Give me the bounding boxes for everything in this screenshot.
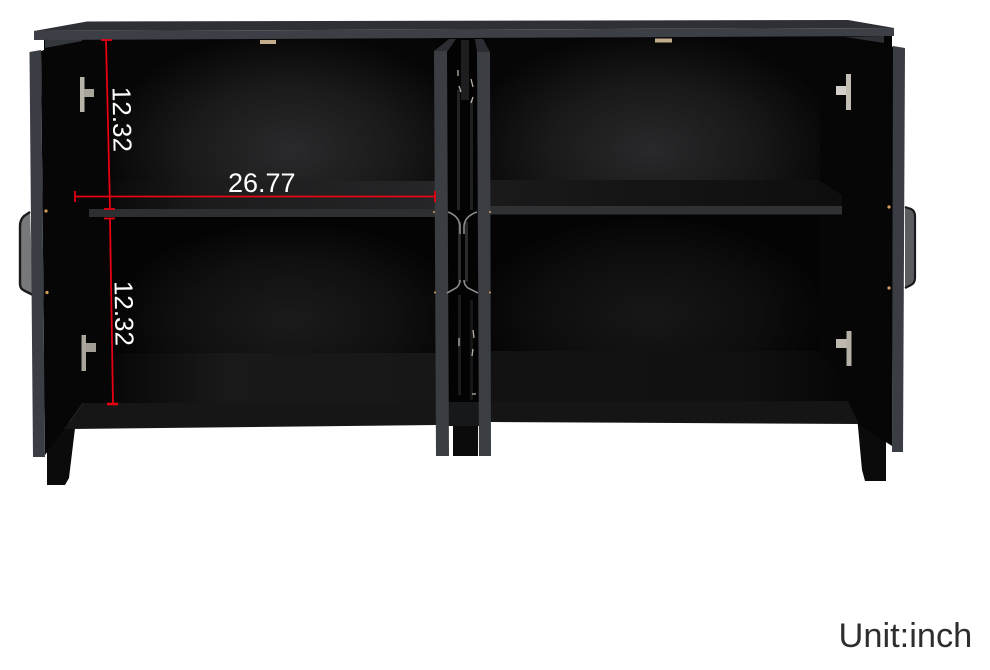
shelf surface left	[110, 181, 436, 209]
lower back wall left	[110, 217, 436, 353]
width dimension line	[75, 191, 435, 202]
lower back wall right	[489, 214, 820, 351]
icon: upper left hinge	[80, 77, 94, 112]
center door handles	[447, 212, 478, 293]
floor left	[110, 353, 436, 403]
shelf surface right	[489, 180, 842, 206]
center left door edge	[434, 39, 456, 456]
left door edge	[30, 50, 45, 457]
icon: lower left hinge	[82, 335, 96, 371]
left bottom rail	[64, 403, 437, 429]
right door edge	[892, 46, 905, 452]
cabinet body backing	[44, 36, 892, 403]
upper height label: 12.32	[107, 87, 138, 152]
cabinet top	[34, 20, 894, 48]
left shelf front edge	[89, 209, 435, 217]
upper back wall left	[110, 38, 436, 181]
lower height label: 12.32	[109, 281, 140, 346]
right shelf front edge	[490, 206, 842, 214]
right door inner panel	[818, 36, 894, 446]
lower height dimension line	[104, 218, 118, 404]
screws	[44, 205, 891, 294]
floor right	[489, 351, 848, 402]
center gap between doors	[445, 36, 480, 426]
legs	[47, 416, 886, 485]
icon: top clips	[260, 38, 672, 44]
center right door edge	[475, 39, 491, 456]
icon: right door handle	[905, 207, 915, 288]
icon: left door handle	[20, 212, 33, 295]
upper height dimension line	[101, 40, 115, 209]
cabinet interior left	[110, 38, 436, 403]
left door inner panel	[41, 38, 110, 455]
upper back wall right	[489, 36, 820, 180]
width label: 26.77	[228, 168, 296, 198]
unit label: Unit:inch	[838, 617, 972, 655]
center hinges	[458, 70, 476, 394]
cabinet interior right	[489, 36, 848, 402]
icon: upper right hinge	[836, 74, 851, 110]
icon: lower right hinge	[836, 331, 852, 366]
right bottom rail	[489, 401, 858, 424]
